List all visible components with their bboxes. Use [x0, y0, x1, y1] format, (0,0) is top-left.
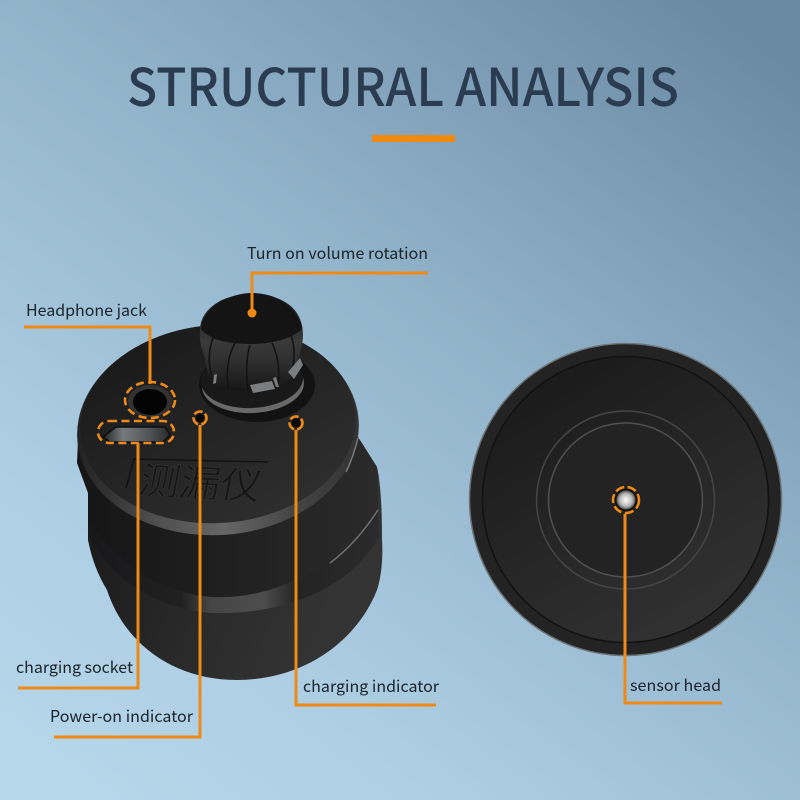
top surface — [73, 316, 363, 532]
sensor ball — [616, 490, 636, 510]
charging indicator hole — [292, 418, 300, 428]
power indicator hole — [196, 414, 204, 422]
knob top — [201, 294, 302, 344]
callout: power-on indicator — [50, 412, 206, 737]
charging socket — [103, 427, 170, 442]
bevel ring — [70, 315, 366, 545]
outer disk — [470, 344, 782, 656]
callout: power-on indicator: Power-on indicator — [50, 703, 194, 727]
callout: charging socket — [16, 421, 174, 688]
callout: charging indicator: charging indicator — [303, 673, 440, 697]
callout: headphone jack: Headphone jack — [26, 297, 147, 321]
knob collar — [200, 349, 304, 411]
knob — [200, 293, 303, 391]
ledge band — [88, 505, 379, 613]
knob silver ring — [201, 354, 305, 416]
knob highlights — [213, 358, 303, 393]
ledge highlight — [330, 510, 378, 563]
device: sensor face — [470, 344, 782, 656]
callout: volume rotation — [247, 240, 428, 318]
outer ring — [536, 411, 714, 589]
emboss bracket — [126, 459, 268, 488]
bevel highlight — [346, 438, 358, 472]
embossed label: 测漏仪 — [135, 451, 267, 510]
callout: headphone jack — [24, 297, 175, 418]
callout: sensor head — [613, 487, 722, 703]
callout: sensor head: sensor head — [630, 672, 721, 696]
callout: volume rotation: Turn on volume rotation — [247, 240, 428, 264]
device: side view — [70, 293, 382, 680]
callout: charging indicator — [290, 416, 440, 705]
knob ridges — [209, 335, 294, 392]
knob base — [199, 348, 315, 422]
callout: charging socket: charging socket — [16, 654, 133, 678]
title underline — [372, 135, 455, 142]
inner dish — [482, 356, 768, 642]
lower body — [88, 437, 382, 680]
title: STRUCTURAL ANALYSIS — [127, 46, 679, 121]
inner ring — [548, 423, 702, 577]
jack hole — [133, 389, 167, 415]
upper body — [77, 420, 378, 597]
headphone jack — [128, 385, 172, 417]
